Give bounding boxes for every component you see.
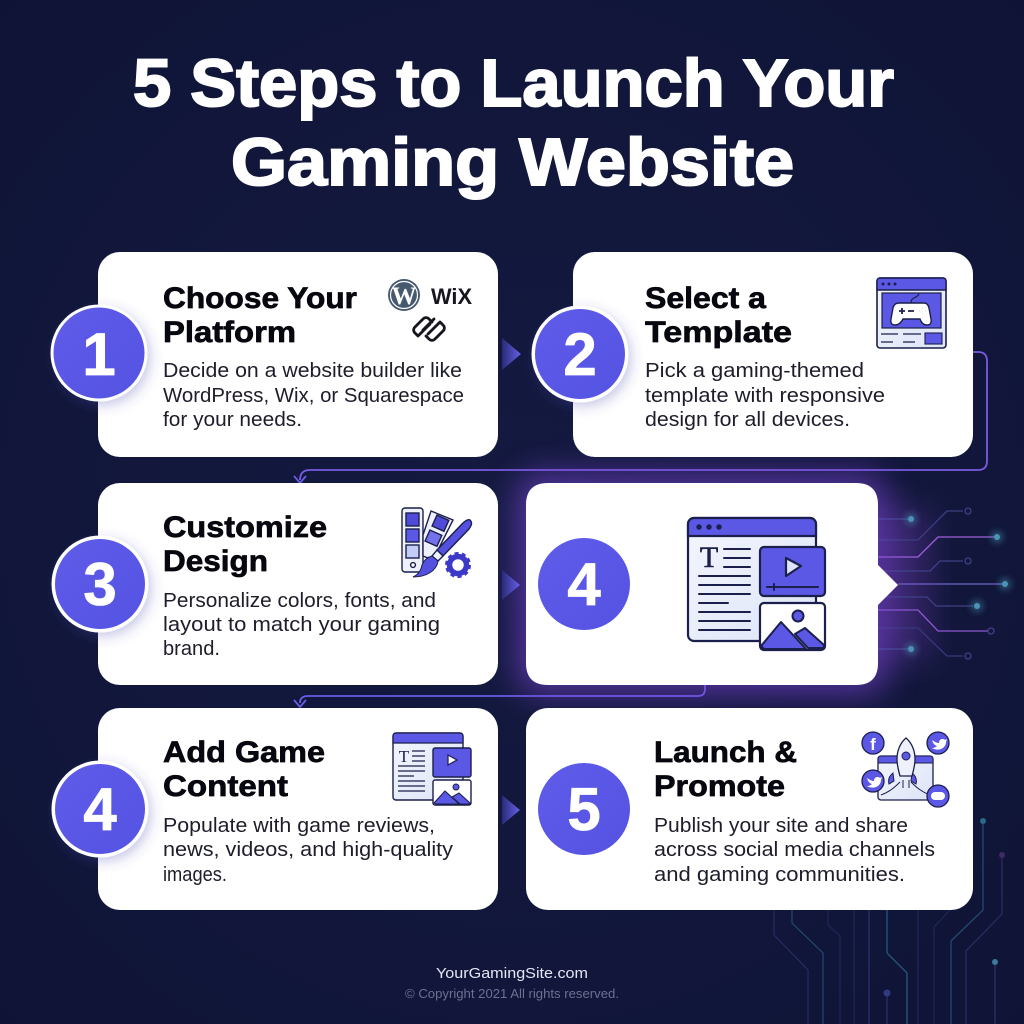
panel: step 3 customize design (98, 483, 498, 685)
heading: customize design (163, 511, 327, 578)
text: add game content description: images. (163, 864, 227, 886)
panel: step 1 choose your platform (98, 252, 498, 457)
badge: step 1 (50, 304, 148, 402)
icon: content layout window: T (700, 541, 718, 574)
heading: choose your platform: Platform (163, 316, 296, 349)
heading: choose your platform: Choose Your (163, 282, 357, 315)
text: step 2 description: Pick a gaming-themed (645, 360, 864, 382)
text: step 1 description: Decide on a website builder like (163, 360, 462, 382)
arrow: step 4 to 5 (502, 795, 520, 825)
badge: step 4 panel (538, 538, 630, 630)
badge: step 4 add content: 4 (83, 776, 117, 843)
glow behind step 4 panel (516, 473, 888, 695)
panel: step 4 large content icon (526, 483, 898, 685)
text: step 5 description: and gaming communities. (654, 864, 905, 886)
heading: launch and promote (654, 736, 797, 803)
text: add game content description: news, videos, and high-quality (163, 839, 453, 861)
title: 5 Steps to Launch Your (133, 46, 894, 121)
text: step 5 description: Publish your site and share (654, 815, 908, 837)
text: step 1 description: for your needs. (163, 409, 302, 431)
badge: step 5: 5 (567, 776, 601, 843)
icon: content layout small: T (399, 747, 410, 766)
heading: customize design: Customize (163, 511, 327, 544)
text: step 2 description (645, 360, 885, 431)
text: step 5 description (654, 815, 935, 886)
panel: step 4 add game content (98, 708, 498, 910)
badge: step 2: 2 (563, 321, 597, 388)
connector: step 2 to step 3 (294, 352, 987, 483)
icon: content layout small (393, 733, 471, 805)
badge: step 2 (532, 306, 628, 402)
icon: wordpress logo (388, 279, 420, 311)
text: step 1 description: WordPress, Wix, or Squarespace (163, 385, 464, 407)
icon: game controller template (877, 278, 946, 348)
icon: content layout window (688, 518, 825, 650)
heading: select a template: Template (645, 316, 792, 349)
badge: step 4 add content (52, 760, 148, 858)
heading: add game content (163, 736, 325, 803)
footer: site name: YourGamingSite.com (436, 965, 588, 982)
icon: squarespace logo (414, 318, 444, 340)
circuit decoration: right of step 4 panel (860, 508, 1011, 660)
text: step 3 description: layout to match your gaming (163, 614, 440, 636)
footer: copyright: © Copyright 2021 All rights reserved. (405, 987, 619, 1001)
text: add game content description (163, 815, 453, 886)
badge: step 3 (52, 536, 148, 632)
text: step 3 description (163, 590, 440, 660)
circuit decoration: bottom right (774, 818, 1005, 1024)
heading: launch and promote: Launch & (654, 736, 797, 769)
text: step 3 description: brand. (163, 638, 220, 660)
text: step 5 description: across social media channels (654, 839, 935, 861)
text: step 2 description: template with responsive (645, 385, 885, 407)
arrow: step 1 to 2 (502, 338, 521, 370)
heading: select a template (645, 282, 792, 349)
panel: step 2 select a template (573, 252, 973, 457)
text: add game content description: Populate with game reviews, (163, 815, 435, 837)
badge: step 3: 3 (83, 551, 117, 618)
badge: step 5 (538, 763, 630, 855)
heading: add game content: Add Game (163, 736, 325, 769)
icon: rocket and social badges: f (870, 735, 876, 754)
text: step 3 description: Personalize colors, fonts, and (163, 590, 436, 612)
arrow: step 3 to 4 (502, 570, 520, 600)
badge: step 1: 1 (82, 321, 116, 388)
text: step 1 description (163, 360, 464, 431)
heading: select a template: Select a (645, 282, 766, 315)
connector: step 4 panel to add game content (294, 685, 705, 707)
heading: launch and promote: Promote (654, 770, 785, 803)
icon: wordpress logo: W (392, 283, 416, 310)
heading: customize design: Design (163, 545, 268, 578)
title (133, 46, 894, 200)
panel: step 5 launch and promote (526, 708, 973, 910)
heading: add game content: Content (163, 770, 288, 803)
heading: choose your platform (163, 282, 357, 349)
text: step 2 description: design for all devices. (645, 409, 850, 431)
icon: rocket and social badges (862, 732, 949, 807)
icon: wix logo: WiX (431, 284, 472, 309)
title: Gaming Website (231, 125, 794, 200)
icon: palette brush gear (402, 508, 472, 577)
badge: step 4 panel: 4 (567, 551, 601, 618)
